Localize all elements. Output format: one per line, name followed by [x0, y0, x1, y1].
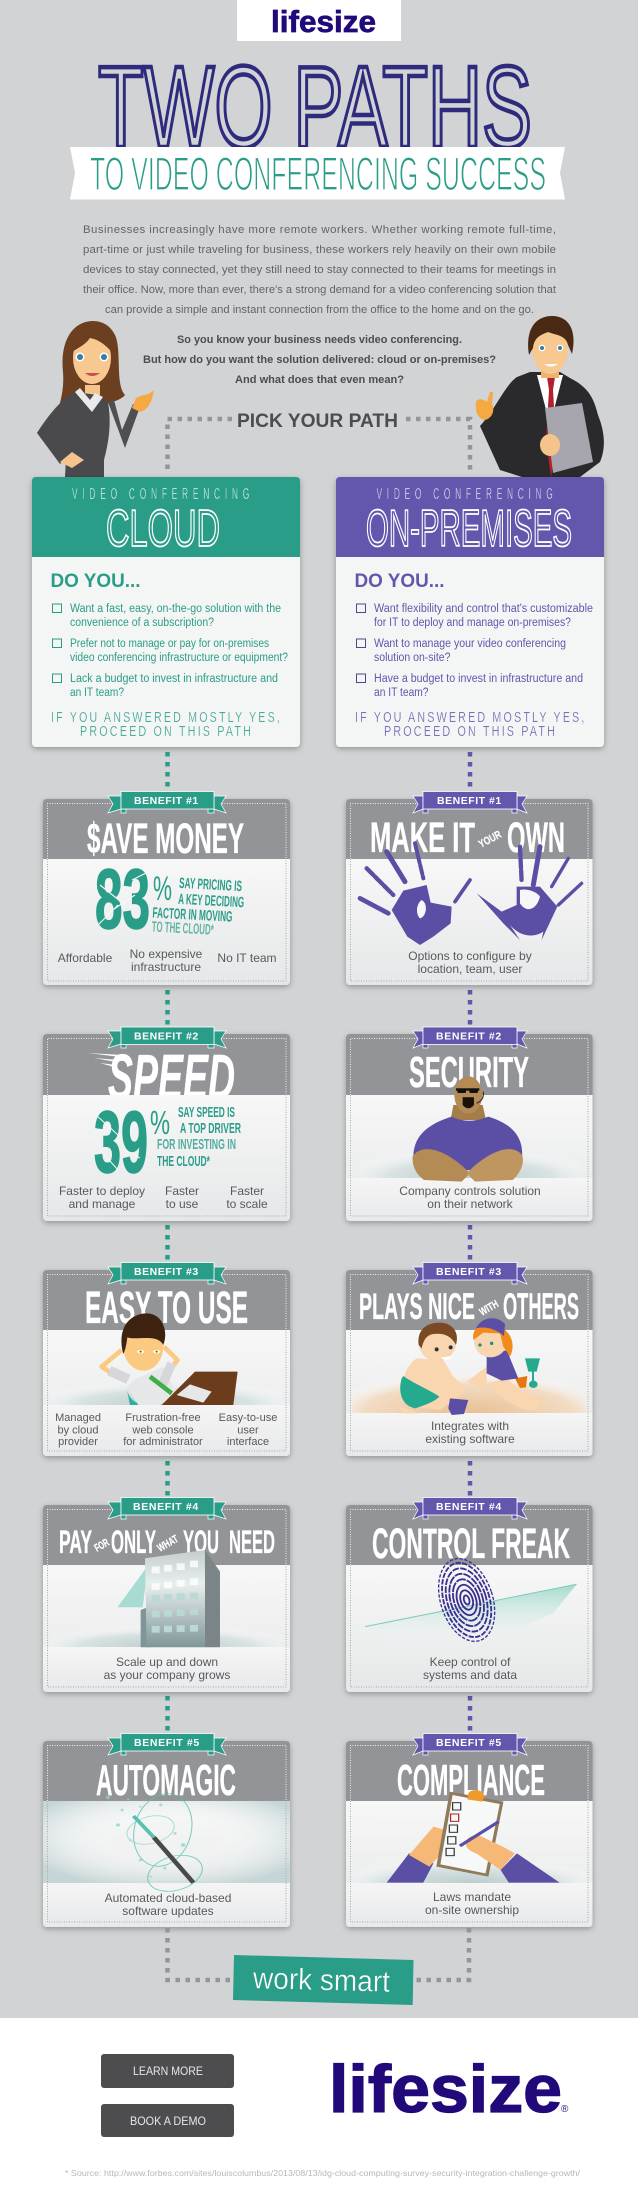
intro paragraph: can provide a simple and instant connection from the office to the home and on the go. — [105, 304, 534, 316]
connector: closing dotted lines — [168, 1928, 469, 1980]
statistic: 83 percent: A KEY DECIDING — [178, 891, 245, 911]
heading: make it your own: OWN — [507, 814, 565, 862]
checklist: Have a budget to invest in infrastructure and — [374, 673, 583, 685]
panel: on-premises benefit 2 security — [346, 1027, 592, 1221]
button: book a demo: BOOK A DEMO — [130, 2116, 206, 2128]
heading: automagic: AUTOMAGIC — [96, 1756, 236, 1805]
captions — [59, 1184, 268, 1211]
icon: businesswoman — [37, 321, 154, 477]
captions: infrastructure — [131, 960, 201, 974]
ribbon: benefit 1: BENEFIT #1 — [437, 795, 503, 807]
captions: No IT team — [217, 951, 277, 965]
captions: Easy-to-use — [219, 1412, 277, 1424]
intro question: So you know your business needs video conferencing. — [177, 334, 462, 346]
ribbon: benefit 4: BENEFIT #4 — [133, 1501, 200, 1513]
statistic: 39 percent: FOR INVESTING IN — [157, 1136, 236, 1153]
intro question: But how do you want the solution delivered: cloud or on-premises? — [143, 354, 496, 366]
heading: pay for only what you need: NEED — [229, 1524, 275, 1560]
checklist: video conferencing infrastructure or equipment? — [70, 652, 288, 664]
captions: Faster — [165, 1184, 199, 1198]
captions: Frustration-free — [125, 1412, 201, 1424]
heading: pay for only what you need: PAY — [59, 1524, 92, 1560]
panel: on-premises benefit 1 make it your own — [346, 792, 592, 985]
cloud conclusion — [51, 709, 282, 740]
statistic: 39 percent: A TOP DRIVER — [180, 1120, 241, 1137]
captions: user — [237, 1424, 259, 1436]
caption — [104, 1655, 230, 1682]
icon: fingerprint — [365, 1551, 577, 1650]
panel: on-premises benefit 5 compliance — [346, 1734, 592, 1927]
checklist: for IT to deploy and manage on-premises? — [374, 617, 571, 629]
icon: relaxed man at desk — [102, 1313, 238, 1405]
heading: pay for only what you need: YOU — [183, 1524, 219, 1560]
panel: cloud — [32, 477, 300, 747]
cloud conclusion: IF YOU ANSWERED MOSTLY YES, — [51, 709, 282, 726]
captions: Faster — [230, 1184, 264, 1198]
statistic: 39 percent: 39 — [94, 1094, 148, 1191]
on-premises header band — [336, 477, 604, 557]
ribbon: benefit 3 — [108, 1262, 226, 1284]
caption — [399, 1184, 541, 1211]
statistic: 83 percent — [95, 852, 245, 946]
panel: cloud benefit 4 pay for only what you need — [43, 1498, 290, 1692]
caption: as your company grows — [104, 1668, 230, 1682]
ribbon: benefit 2: BENEFIT #2 — [436, 1030, 503, 1042]
connector: pick your path dotted lines — [168, 419, 470, 474]
captions — [58, 947, 277, 974]
caption — [425, 1890, 519, 1917]
statistic: 39 percent — [94, 1094, 241, 1191]
icon: office building — [117, 1550, 220, 1647]
captions — [55, 1412, 277, 1448]
statistic: 39 percent: % — [150, 1104, 170, 1141]
logo: lifesize footer: lifesize — [329, 2052, 562, 2127]
cloud conclusion: PROCEED ON THIS PATH — [80, 723, 253, 740]
button: learn more: LEARN MORE — [133, 2066, 203, 2078]
caption: Automated cloud-based — [105, 1891, 231, 1905]
caption: Options to configure by — [408, 949, 532, 963]
caption — [105, 1891, 231, 1918]
caption: Integrates with — [431, 1419, 509, 1433]
statistic: 83 percent: FACTOR IN MOVING — [152, 905, 233, 926]
do you heading: DO YOU... — [50, 571, 140, 592]
panel: on-premises — [336, 477, 604, 747]
ribbon: benefit 1 — [108, 792, 226, 813]
caption — [408, 949, 532, 976]
heading: plays nice with others: WITH — [478, 1298, 501, 1319]
source footnote: * Source: http://www.forbes.com/sites/louiscolumbus/2013/08/13/idg-cloud-computing-survey-security-integration-challenge-growth/ — [65, 2168, 581, 2178]
caption — [425, 1419, 515, 1446]
caption — [423, 1655, 517, 1682]
captions: Managed — [55, 1412, 101, 1424]
connector: on-premises path dots — [468, 752, 472, 1734]
panel: cloud benefit 1 save money — [43, 792, 290, 985]
captions: and manage — [69, 1197, 136, 1211]
caption: existing software — [425, 1432, 515, 1446]
ribbon: benefit 1: BENEFIT #1 — [134, 795, 200, 807]
ribbon: benefit 3 — [413, 1262, 527, 1284]
captions: Affordable — [58, 951, 113, 965]
button: book a demo — [101, 2104, 234, 2137]
checklist: Prefer not to manage or pay for on-premises — [70, 638, 269, 650]
captions: Faster to deploy — [59, 1184, 145, 1198]
ribbon: benefit 3: BENEFIT #3 — [134, 1266, 200, 1278]
checklist: an IT team? — [70, 687, 124, 699]
heading: pay for only what you need — [59, 1524, 275, 1560]
heading: pay for only what you need: ONLY — [111, 1524, 156, 1560]
icon: security guard — [413, 1076, 523, 1182]
heading: pick your path: PICK YOUR PATH — [237, 411, 398, 432]
ribbon: benefit 2: BENEFIT #2 — [134, 1030, 200, 1042]
checklist — [356, 603, 593, 699]
ribbon: benefit 3: BENEFIT #3 — [436, 1266, 503, 1278]
cloud title: CLOUD — [106, 500, 220, 558]
ribbon: benefit 2 — [413, 1027, 527, 1048]
ribbon: benefit 5: BENEFIT #5 — [436, 1737, 503, 1749]
statistic: 39 percent: SAY SPEED IS — [178, 1104, 235, 1121]
intro paragraph: part-time or just while traveling for business, these workers rely heavily on their own mobile — [83, 244, 556, 256]
brand tag: work smart: work smart — [252, 1962, 391, 1999]
statistic: 83 percent: TO THE CLOUD* — [151, 919, 214, 939]
ribbon: benefit 4 — [413, 1498, 527, 1519]
panel: cloud benefit 2 speed — [43, 1027, 290, 1221]
heading: plays nice with others: PLAYS NICE — [359, 1286, 475, 1327]
do you heading: DO YOU... — [354, 571, 444, 592]
caption: location, team, user — [418, 962, 522, 976]
ribbon: benefit 2 — [108, 1027, 226, 1048]
captions: web console — [131, 1424, 194, 1436]
icon: businessman — [476, 316, 604, 478]
intro paragraph — [83, 224, 557, 316]
cloud header band — [32, 477, 300, 557]
captions: by cloud — [58, 1424, 98, 1436]
checklist: Want a fast, easy, on-the-go solution with the — [70, 603, 281, 615]
checklist: Want flexibility and control that's customizable — [374, 603, 593, 615]
ribbon: benefit 4 — [108, 1498, 226, 1519]
checklist: Lack a budget to invest in infrastructure and — [70, 673, 278, 685]
caption: on their network — [427, 1197, 514, 1211]
caption: Laws mandate — [433, 1890, 511, 1904]
ribbon: benefit 5: BENEFIT #5 — [134, 1737, 201, 1749]
on-premises conclusion: PROCEED ON THIS PATH — [384, 723, 557, 740]
heading: speed — [88, 1053, 234, 1095]
button: learn more — [101, 2054, 234, 2088]
icon: hands with clipboard — [387, 1790, 560, 1883]
checklist: solution on-site? — [374, 652, 450, 664]
heading: security: SECURITY — [409, 1048, 529, 1097]
intro paragraph: their office. Now, more than ever, there's a strong demand for a video conferencing solution that — [83, 284, 557, 296]
statistic: 83 percent: SAY PRICING IS — [179, 875, 242, 895]
logo: lifesize footer: ® — [561, 2104, 569, 2115]
caption: systems and data — [423, 1668, 517, 1682]
statistic: 83 percent: 83 — [95, 852, 150, 946]
intro paragraph: devices to stay connected, yet they still need to stay connected to their teams for meetings in — [83, 264, 556, 276]
checklist — [52, 603, 288, 699]
ribbon: benefit 5 — [413, 1734, 527, 1755]
logo: lifesize top: lifesize — [271, 4, 376, 39]
checklist: Want to manage your video conferencing — [374, 638, 566, 650]
statistic: 83 percent: % — [153, 870, 172, 908]
brand tag: work smart — [233, 1955, 414, 2005]
heading: pay for only what you need: FOR — [92, 1537, 112, 1555]
heading: easy to use: EASY TO USE — [85, 1282, 248, 1333]
ribbon: benefit 4: BENEFIT #4 — [436, 1501, 503, 1513]
caption: Keep control of — [430, 1655, 511, 1669]
heading: make it your own: YOUR — [477, 829, 504, 851]
intro question — [143, 334, 496, 386]
captions: to use — [166, 1197, 199, 1211]
intro paragraph: Businesses increasingly have more remote workers. Whether working remote full-time, — [83, 224, 556, 236]
captions: provider — [58, 1436, 98, 1448]
captions: No expensive — [130, 947, 203, 961]
statistic: 39 percent: THE CLOUD* — [157, 1153, 210, 1170]
panel: cloud benefit 3 easy to use — [43, 1262, 290, 1456]
heading: pay for only what you need: WHAT — [156, 1533, 181, 1555]
cloud eyebrow: VIDEO CONFERENCING — [72, 486, 254, 503]
heading: make it your own: MAKE IT — [370, 814, 475, 862]
on-premises conclusion — [355, 709, 586, 740]
captions: for administrator — [123, 1436, 203, 1448]
logo: lifesize top — [237, 0, 401, 41]
captions: to scale — [226, 1197, 268, 1211]
checklist: convenience of a subscription? — [70, 617, 214, 629]
caption: Scale up and down — [116, 1655, 218, 1669]
icon: magic wand — [106, 1790, 209, 1898]
panel: on-premises benefit 4 control freak — [346, 1498, 592, 1692]
checklist: an IT team? — [374, 687, 428, 699]
intro question: And what does that even mean? — [235, 374, 404, 386]
caption: on-site ownership — [425, 1903, 519, 1917]
ribbon: benefit 1 — [413, 792, 527, 813]
panel: on-premises benefit 3 plays nice with others — [346, 1262, 592, 1456]
icon: children playing in sand — [388, 1318, 542, 1415]
ribbon: benefit 5 — [108, 1734, 226, 1755]
caption: software updates — [122, 1904, 214, 1918]
heading: speed: SPEED — [108, 1041, 235, 1113]
heading: save money: $AVE MONEY — [87, 815, 244, 863]
icon: two handprints — [360, 843, 582, 945]
footer band — [0, 2018, 638, 2187]
connector: cloud path dots — [165, 752, 170, 1734]
caption: Company controls solution — [399, 1184, 541, 1198]
panel: cloud benefit 5 automagic — [43, 1734, 290, 1927]
captions: interface — [227, 1436, 269, 1448]
